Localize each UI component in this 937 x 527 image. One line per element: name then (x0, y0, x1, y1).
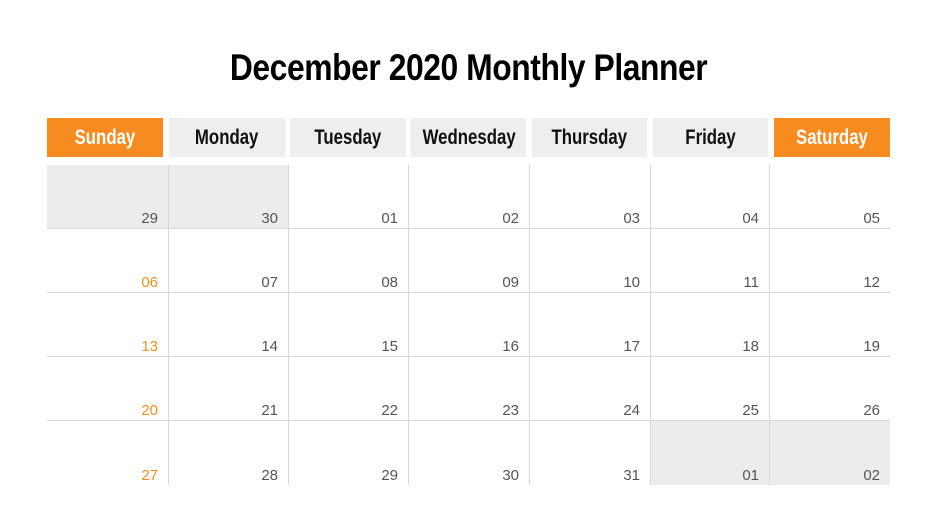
calendar grid: 30 (502, 467, 519, 484)
calendar grid: 01 (381, 210, 398, 227)
calendar grid: 02 (502, 210, 519, 227)
calendar grid: 08 (381, 274, 398, 291)
header: Saturday: Saturday (796, 126, 868, 149)
calendar grid: 23 (502, 402, 519, 419)
calendar grid: 18 (742, 338, 759, 355)
calendar grid: 28 (261, 467, 278, 484)
calendar grid: 14 (261, 338, 278, 355)
calendar grid: 25 (742, 402, 759, 419)
calendar grid: 15 (381, 338, 398, 355)
header: Wednesday (411, 118, 526, 157)
header: Sunday: Sunday (75, 126, 135, 149)
header: Tuesday: Tuesday (315, 126, 381, 149)
calendar grid (47, 165, 890, 485)
calendar grid: 29 (381, 467, 398, 484)
calendar grid: 19 (863, 338, 880, 355)
calendar grid: 01 (742, 467, 759, 484)
calendar grid: 20 (141, 402, 158, 419)
calendar grid: 13 (141, 338, 158, 355)
header: Friday (653, 118, 768, 157)
calendar grid: 11 (743, 274, 759, 291)
header: Wednesday: Wednesday (423, 126, 516, 149)
calendar grid: 21 (261, 402, 278, 419)
header: Monday: Monday (195, 126, 259, 149)
title: December 2020 Monthly Planner (230, 47, 707, 88)
header: Friday: Friday (685, 126, 736, 149)
header: Monday (169, 118, 285, 157)
calendar grid: 31 (623, 467, 640, 484)
calendar grid: 07 (261, 274, 278, 291)
header: Thursday (532, 118, 647, 157)
calendar grid: 30 (261, 210, 278, 227)
header: Saturday (774, 118, 890, 157)
calendar grid: 09 (502, 274, 519, 291)
header: weekdays (47, 118, 890, 157)
calendar grid: 05 (863, 210, 880, 227)
header: Thursday: Thursday (552, 126, 627, 149)
calendar grid: 26 (863, 402, 880, 419)
calendar grid: 03 (623, 210, 640, 227)
calendar grid: 27 (141, 467, 158, 484)
calendar grid: 29 (141, 210, 158, 227)
calendar grid: 17 (623, 338, 640, 355)
calendar grid: 06 (141, 274, 158, 291)
calendar grid: 10 (623, 274, 640, 291)
calendar grid: 16 (502, 338, 519, 355)
calendar grid: 12 (863, 274, 880, 291)
calendar grid: 22 (381, 402, 398, 419)
calendar grid: 02 (863, 467, 880, 484)
header: Tuesday (290, 118, 406, 157)
calendar grid: 04 (742, 210, 759, 227)
header: Sunday (47, 118, 163, 157)
calendar grid: 24 (623, 402, 640, 419)
